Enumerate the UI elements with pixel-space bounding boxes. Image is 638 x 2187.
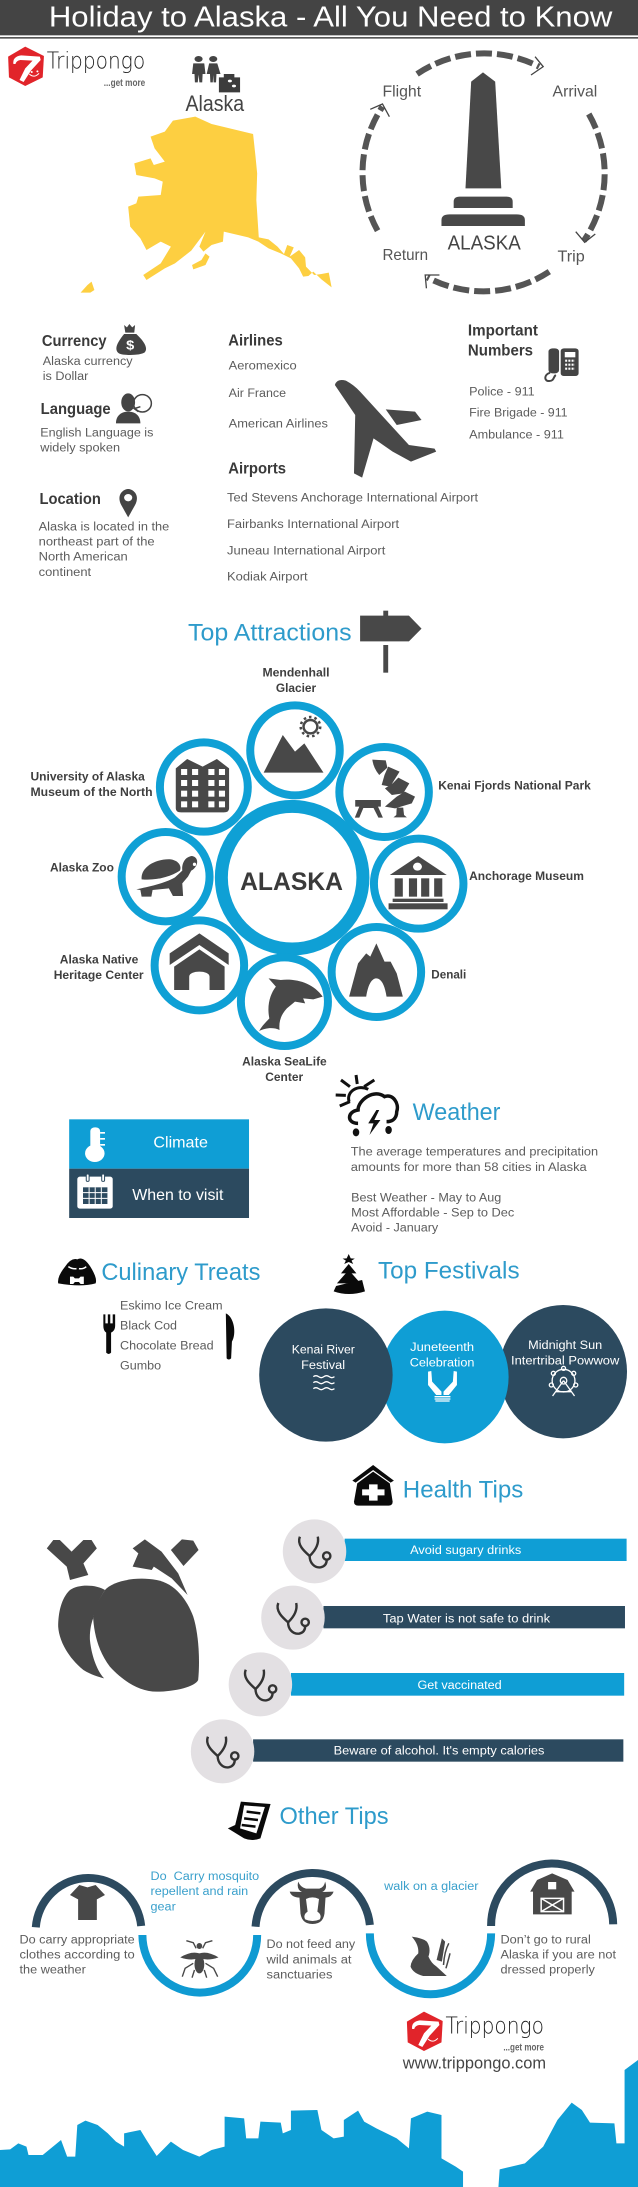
tip: rural Alaska: Don’t go to rural (500, 1933, 591, 1946)
festival: Juneteenth Celebration (381, 1311, 509, 1443)
label: University of Alaska Museum of the North (31, 770, 153, 799)
heading: Other Tips: Other Tips (280, 1802, 389, 1829)
language block: Language (41, 401, 111, 418)
label: Anchorage Museum: Anchorage Museum (469, 869, 584, 883)
panel: weather, culinary and festivals (58, 1075, 627, 1443)
panel: top attractions (31, 611, 591, 1084)
logo: Trippongo footer: Trippongo (446, 2013, 544, 2039)
icon: money bag: $ (126, 338, 134, 352)
panel: when to visit (69, 1169, 249, 1218)
text: weather description: Avoid - January (351, 1221, 438, 1234)
label: Mendenhall Glacier: Mendenhall (262, 666, 330, 679)
icon: river waves (313, 1376, 334, 1390)
airports list: Ted Stevens Anchorage International Airport (227, 491, 478, 504)
icon: thermometer (85, 1127, 105, 1162)
icon: mosquito (180, 1941, 218, 1978)
attraction: Alaska SeaLife Center (241, 957, 328, 1046)
icon: stethoscope (299, 1537, 330, 1567)
airlines list: Airlines (228, 332, 283, 349)
festival: Kenai River Festival: Kenai River (292, 1343, 355, 1356)
tip: rural Alaska: dressed properly (500, 1963, 595, 1976)
heading: Culinary Treats: Culinary Treats (101, 1258, 260, 1285)
chart: trip cycle around monument (363, 53, 605, 291)
location block: continent (39, 565, 91, 579)
culinary list with cutlery (103, 1299, 234, 1372)
label: Alaska SeaLife Center: Alaska SeaLife (242, 1055, 327, 1068)
culinary list with cutlery: Gumbo (120, 1359, 161, 1372)
diagram: attractions wheel (122, 705, 463, 1046)
label: Alaska Zoo: Alaska Zoo (50, 861, 114, 874)
tip: Beware of alcohol (191, 1719, 623, 1783)
logo: Trippongo footer: ...get more (503, 2043, 544, 2053)
icon: health house (352, 1465, 394, 1506)
location block: Alaska is located in the (39, 520, 170, 533)
tip: clothes: clothes according to (20, 1948, 135, 1961)
icon: map pin (119, 489, 137, 517)
location block: Location (39, 491, 101, 508)
icon: fork (103, 1314, 115, 1354)
icon: tips scroll (228, 1802, 271, 1840)
icon: stethoscope (278, 1603, 309, 1634)
tip: mosquito repellent: gear (151, 1900, 176, 1913)
icon: knife (226, 1313, 234, 1359)
icon: cow (290, 1882, 334, 1924)
panel: when to visit: When to visit (132, 1187, 224, 1204)
logo: Trippongo footer (407, 2012, 544, 2053)
currency block: Alaska currency (43, 354, 133, 368)
festival: Juneteenth Celebration: Juneteenth (410, 1340, 474, 1354)
tip: clothes: the weather (20, 1963, 86, 1976)
icon: glacier grass (411, 1937, 450, 1976)
tip: rural Alaska (491, 1864, 616, 1976)
important numbers block: Ambulance - 911 (469, 428, 564, 441)
festival: Midnight Sun Intertribal Powwow: Intertribal Powwow (511, 1354, 619, 1367)
map of Alaska (81, 117, 332, 293)
airports list: Kodiak Airport (227, 570, 308, 583)
culinary list with cutlery: Black Cod (120, 1319, 177, 1332)
important numbers block: Fire Brigade - 911 (469, 406, 568, 419)
tip: clothes (20, 1878, 141, 1976)
icon: heart (47, 1539, 199, 1692)
label: Mendenhall Glacier: Glacier (276, 681, 316, 695)
tip: Avoid sugary drinks (283, 1519, 627, 1583)
tip: wild animals (256, 1873, 370, 1981)
attraction: University of Alaska Museum of the North (160, 742, 248, 832)
airlines list: American Airlines (229, 417, 328, 430)
heading: Weather: Weather (413, 1098, 501, 1125)
icon: monument (441, 72, 525, 226)
panel: climate (69, 1119, 249, 1169)
label: University of Alaska Museum of the North: Museum of the North (31, 785, 153, 799)
festival: Midnight Sun Intertribal Powwow (499, 1305, 627, 1438)
important numbers block: Important (468, 322, 538, 339)
currency block: Currency (42, 333, 107, 350)
currency block (42, 324, 146, 383)
airports list: Airports (228, 460, 286, 477)
tip: Get vaccinated: Get vaccinated (417, 1678, 502, 1692)
label: Denali: Denali (431, 968, 466, 981)
tip: Tap Water is not safe to drink: Tap Water is not safe to drink (383, 1612, 550, 1625)
centre circle: ALASKA: ALASKA (240, 867, 343, 895)
label: Alaska SeaLife Center: Center (265, 1070, 303, 1084)
label: Alaska Native Heritage Center (54, 953, 144, 982)
arrow: trip to return (425, 272, 549, 291)
festival: Kenai River Festival: Festival (301, 1358, 345, 1372)
label: Kenai Fjords National Park: Kenai Fjords National Park (438, 779, 591, 792)
icon: t-shirt (70, 1885, 105, 1920)
label: Alaska Native Heritage Center: Heritage Center (54, 968, 144, 982)
arrow: arrival to trip (576, 114, 605, 242)
airlines list: Air France (229, 386, 286, 400)
icon: barn (530, 1873, 575, 1914)
panel: other tips and footer (0, 1802, 638, 2187)
logo: Trippongo: ...get more (104, 78, 145, 89)
tip: walk on a glacier: walk on a glacier (383, 1879, 479, 1893)
attraction: Alaska Native Heritage Center (155, 920, 244, 1010)
logo: Trippongo (8, 47, 145, 89)
heading: Top Festivals: Top Festivals (378, 1257, 520, 1284)
icon: culinary dish (58, 1259, 96, 1285)
text: weather description (351, 1145, 598, 1234)
attraction: Kenai Fjords National Park (339, 747, 429, 837)
label: Alaska SeaLife Center (242, 1055, 327, 1084)
tip: walk on a glacier (370, 1879, 491, 1994)
text: weather description: Most Affordable - Sep to Dec (351, 1206, 514, 1219)
attraction: Denali (332, 927, 421, 1017)
arrow: return to flight (363, 104, 389, 231)
arrow: flight to arrival (417, 53, 543, 75)
icon: travellers with suitcase (192, 56, 240, 92)
location block: North American (39, 550, 128, 563)
currency block: is Dollar (43, 369, 89, 383)
tip: mosquito repellent: Do Carry mosquito (151, 1869, 259, 1883)
tip: Get vaccinated (229, 1652, 624, 1716)
tip: mosquito repellent: repellent and rain (151, 1884, 248, 1898)
airports list (227, 460, 478, 583)
panel: health tips (47, 1465, 627, 1783)
important numbers block: Numbers (468, 342, 533, 359)
festival: Juneteenth Celebration: Celebration (410, 1356, 474, 1369)
attraction: Alaska Zoo (122, 832, 210, 921)
airports list: Juneau International Airport (227, 544, 385, 557)
tip: wild animals: Do not feed any (267, 1937, 355, 1951)
tip: Avoid sugary drinks: Avoid sugary drinks (410, 1543, 521, 1557)
text: weather description: Best Weather - May to Aug (351, 1191, 501, 1204)
important numbers block (468, 322, 579, 441)
icon: signpost (360, 611, 422, 673)
icon: stethoscope (207, 1737, 238, 1767)
label: Trip: Trip (557, 247, 585, 265)
festival: Midnight Sun Intertribal Powwow: Midnight Sun (528, 1338, 602, 1352)
language block (39, 393, 153, 454)
attraction: Anchorage Museum (374, 839, 463, 929)
airports list: Fairbanks International Airport (227, 517, 399, 531)
panel: header and overview (0, 0, 638, 293)
festival: Kenai River Festival (259, 1308, 393, 1442)
icon: speaking person (116, 393, 151, 423)
icon: ferris wheel (549, 1366, 578, 1396)
language block: English Language is (40, 426, 153, 439)
icon: airplane (335, 380, 436, 478)
heading: Alaska: Alaska (186, 92, 244, 116)
tip: mosquito repellent (142, 1869, 259, 1993)
label: ALASKA: ALASKA (448, 231, 521, 254)
text: weather description: The average temperatures and precipitation (351, 1145, 598, 1158)
logo: Trippongo: Trippongo (47, 48, 145, 74)
tip: clothes: Do carry appropriate (20, 1933, 135, 1946)
culinary list with cutlery: Eskimo Ice Cream (120, 1299, 223, 1312)
text: website: www.trippongo.com (402, 2053, 546, 2072)
skyline (0, 2060, 638, 2187)
heading: Top Attractions: Top Attractions (188, 619, 352, 646)
tip: rural Alaska: Alaska if you are not (500, 1948, 616, 1961)
location block (39, 489, 170, 579)
label: Flight: Flight (382, 82, 421, 100)
icon: telephone (545, 348, 579, 381)
text: weather description: amounts for more than 58 cities in Alaska (351, 1160, 587, 1174)
icon: stethoscope (245, 1670, 276, 1700)
label: Mendenhall Glacier (262, 666, 330, 695)
icon: open hands (428, 1371, 457, 1401)
language block: widely spoken (39, 441, 120, 454)
label: University of Alaska Museum of the North: University of Alaska (31, 770, 145, 783)
tip: wild animals: wild animals at (266, 1953, 352, 1966)
airlines list (228, 332, 328, 430)
airlines list: Aeromexico (229, 359, 297, 372)
label: Alaska Native Heritage Center: Alaska Native (60, 953, 138, 966)
icon: festive tree (334, 1254, 365, 1294)
label: Arrival: Arrival (553, 82, 597, 100)
icon: weather storm cloud (336, 1075, 397, 1136)
panel: practical information (39, 322, 579, 583)
attraction: Mendenhall Glacier (250, 705, 340, 795)
important numbers block: Police - 911 (469, 385, 535, 398)
label: Return: Return (382, 246, 428, 264)
centre circle: ALASKA (221, 806, 363, 949)
tip: wild animals: sanctuaries (267, 1968, 333, 1981)
tip: Beware of alcohol: Beware of alcohol. It's empty calories (334, 1744, 545, 1757)
heading: Health Tips: Health Tips (403, 1476, 523, 1503)
location block: northeast part of the (39, 535, 155, 548)
culinary list with cutlery: Chocolate Bread (120, 1339, 214, 1352)
icon: calendar (77, 1174, 113, 1209)
tip: Tap Water is not safe to drink (261, 1586, 625, 1650)
panel: climate: Climate (153, 1134, 208, 1151)
